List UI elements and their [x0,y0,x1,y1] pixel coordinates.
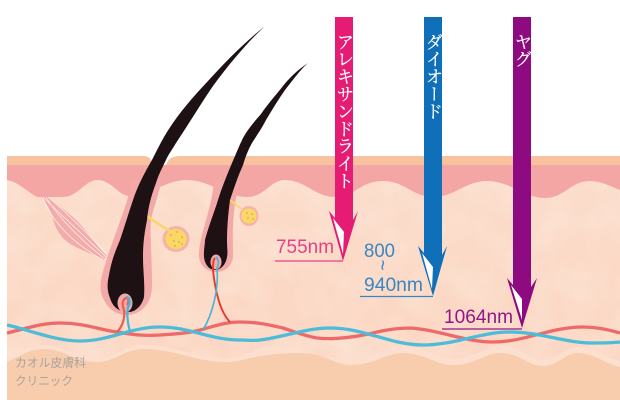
dermis layer [7,165,620,400]
vessel: vein main [7,325,620,345]
arrector pili muscle [42,197,107,260]
arrow: diode [418,17,447,296]
hair root 2 papilla and capillaries [203,254,230,330]
texture [7,165,620,400]
follicle sheath 2 [199,180,240,272]
hair 2 [204,63,308,270]
vessel: artery main [7,322,620,342]
epidermis pink layer [7,165,620,198]
hair 1 [108,26,265,312]
arrow: alexandrite [329,17,358,261]
wavelength label: 800-940nm: 800 [364,241,395,262]
wavelength label: 1064nm: 1064nm [444,307,513,328]
light lower band [7,345,620,400]
watermark: clinic name: クリニック [15,374,73,388]
wavelength label: 755nm: 755nm [276,237,334,258]
watermark: clinic name [15,356,86,388]
wavelength label: 800-940nm: 940nm [364,275,423,296]
subcutaneous layer [7,349,620,400]
sebaceous gland 1 [147,216,190,252]
arrow: YAG [507,17,537,328]
label: alexandrite: アレキサンドライト [334,33,354,190]
stratum corneum left [7,156,153,165]
hair root 1 papilla and capillaries [117,294,132,332]
label: YAG: ヤグ [512,33,532,68]
stratum corneum right [166,156,620,165]
watermark: clinic name: カオル皮膚科 [15,356,86,370]
label: diode: ダイオード [423,33,443,120]
sebaceous gland 2 [230,200,258,226]
skin cross-section [7,156,620,400]
follicle sheath 1 [101,180,162,315]
wavelength label: 800-940nm: ~ [371,259,392,271]
wavelength label: 800-940nm [360,241,433,296]
